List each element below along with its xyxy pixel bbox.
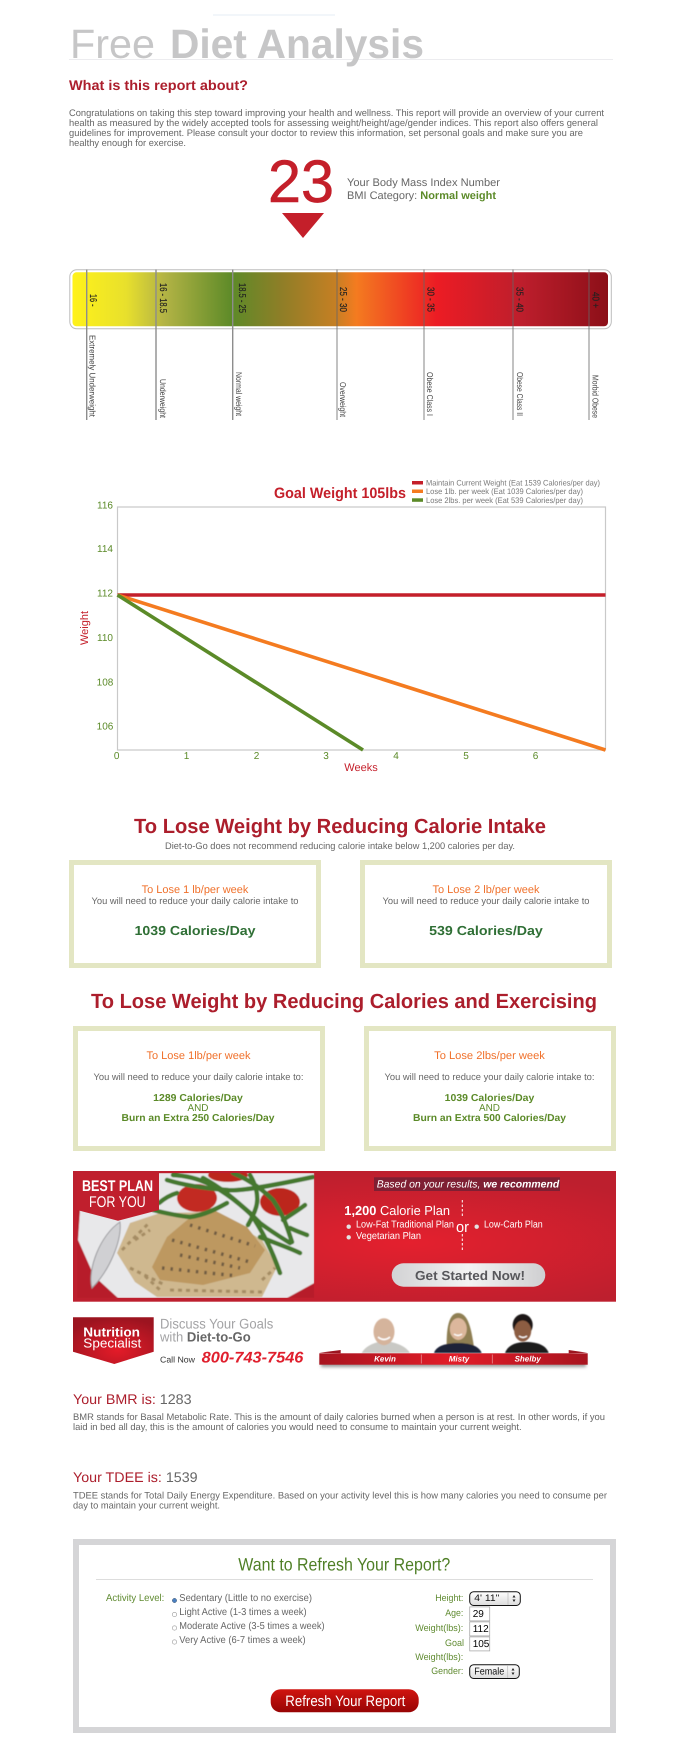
y axis values: 116 — [97, 500, 113, 512]
specialist: Shelby — [505, 1314, 549, 1353]
photo: chicken with rice and green beans — [77, 1168, 314, 1298]
name ribbon — [319, 1350, 588, 1367]
phone contact block: with Diet-to-Go — [159, 1330, 251, 1345]
BMI category labels: Normal weight — [234, 372, 244, 417]
gender select: Female — [474, 1666, 505, 1678]
panel: lose 2 lbs with exercise: To Lose 2lbs/per week — [434, 1050, 545, 1062]
BMR section: laid in bed all day, this is the amount of calories you would need to consume to maintain your current weight. — [73, 1422, 522, 1433]
plan options: Low-Carb Plan — [484, 1220, 543, 1231]
field labels: Goal — [445, 1638, 464, 1649]
y axis title: Weight — [79, 611, 91, 645]
weight input: 112 — [473, 1624, 489, 1635]
chart legend: Lose 1lb. per week (Eat 1039 Calories/per day) — [426, 487, 583, 496]
activity level options — [106, 1593, 325, 1646]
panel: lose 1 lb with exercise: Burn an Extra 250 Calories/Day — [122, 1113, 275, 1124]
height select: 4' 11" — [474, 1593, 499, 1604]
button: refresh your report: Refresh Your Report — [285, 1693, 406, 1710]
panel: plan recommendation banner — [73, 1168, 616, 1302]
BMI category labels: Obese Class I — [425, 372, 435, 416]
BMI caption — [347, 177, 500, 202]
age input: 29 — [473, 1609, 484, 1620]
y axis values — [97, 500, 114, 732]
TDEE section: TDEE stands for Total Daily Energy Expenditure. Based on your activity level this is how many calories you need to consume per — [73, 1490, 607, 1502]
tomatoes — [177, 1184, 217, 1212]
x axis title: Weeks — [344, 762, 378, 774]
panel: lose 1 lb with exercise: You will need to reduce your daily calorie intake to: — [94, 1072, 304, 1083]
diet analysis report page — [69, 14, 616, 1733]
activity level options: Light Active (1-3 times a week) — [179, 1607, 307, 1618]
BMI scale chart — [70, 270, 611, 420]
BMI caption: Your Body Mass Index Number — [347, 177, 500, 189]
badge: nutrition specialist: Specialist — [83, 1336, 142, 1351]
x axis values: 4 — [393, 751, 399, 762]
x axis values: 2 — [254, 751, 260, 762]
field labels: Weight(lbs): — [415, 1652, 463, 1663]
intro paragraph: guidelines for improvement. Please consult your doctor to review this information, set personal goals and make sure you are — [69, 128, 583, 139]
heading: what is this report about: What is this report about? — [69, 77, 248, 93]
x axis values: 5 — [463, 751, 469, 762]
goal weight input: 105 — [473, 1639, 490, 1650]
BMI result — [268, 148, 500, 238]
BMI ranges: 40 + — [590, 292, 600, 308]
BMI category labels: Overweight — [338, 382, 348, 418]
scale bar — [70, 270, 611, 329]
BMI ranges: 16 - — [87, 294, 98, 306]
title: Diet Analysis — [170, 21, 424, 67]
x axis values: 1 — [184, 751, 190, 762]
activity level options: Activity Level: — [106, 1593, 164, 1604]
ribbon: best plan for you: FOR YOU — [89, 1194, 146, 1211]
BMI ranges: 35 - 40 — [514, 287, 524, 312]
heading: calories and exercising: To Lose Weight by Reducing Calories and Exercising — [91, 990, 597, 1013]
panel: lose 2 lbs with exercise: AND — [479, 1103, 500, 1114]
chart title: Goal Weight 105lbs — [274, 485, 406, 502]
intro paragraph: health as measured by the widely accepted tools for assessing weight/height/age/gender indices. This report also offers general — [69, 118, 598, 129]
phone contact block: 800-743-7546 — [202, 1350, 304, 1367]
x axis values: 0 — [114, 751, 120, 762]
plan options: 1,200 Calorie Plan — [344, 1203, 450, 1218]
field labels: Weight(lbs): — [415, 1623, 463, 1634]
chart legend: Maintain Current Weight (Eat 1539 Calories/per day) — [426, 478, 600, 488]
beans — [153, 1173, 313, 1273]
x axis values: 6 — [533, 751, 539, 762]
BMI category labels: Morbid Obese — [590, 375, 600, 418]
TDEE section: Your TDEE is: 1539 — [73, 1469, 198, 1485]
panel: lose 2 lb intake: To Lose 2 lb/per week — [432, 884, 540, 896]
ribbon: best plan for you: BEST PLAN — [82, 1178, 153, 1195]
field labels — [415, 1593, 464, 1677]
BMR section: BMR stands for Basal Metabolic Rate. This is the amount of daily calories burned when a person is at rest. In other words, if you — [73, 1412, 605, 1423]
phone contact block: Call Now — [160, 1355, 196, 1365]
plot frame — [118, 507, 606, 750]
field labels: Age: — [445, 1608, 463, 1619]
y axis values: 114 — [97, 544, 113, 555]
panel: lose 1 lb with exercise: AND — [188, 1103, 208, 1114]
intro paragraph — [69, 108, 604, 149]
panel: lose 2 lbs with exercise: Burn an Extra 500 Calories/Day — [413, 1113, 566, 1124]
age input — [470, 1607, 490, 1621]
TDEE section — [73, 1469, 607, 1512]
badge: nutrition specialist: Nutrition — [83, 1325, 140, 1340]
BMI ranges: 16 - 18.5 — [157, 283, 168, 313]
panel: lose 2 lbs with exercise: You will need to reduce your daily calorie intake to: — [384, 1072, 594, 1083]
BMI ranges — [87, 283, 600, 313]
activity level options: Sedentary (Little to no exercise) — [179, 1593, 312, 1604]
x axis values: 3 — [323, 751, 329, 762]
chart legend: Lose 2lbs. per week (Eat 539 Calories/per day) — [426, 496, 583, 505]
activity level options: Moderate Active (3-5 times a week) — [179, 1621, 325, 1632]
button: get started now: Get Started Now! — [415, 1268, 525, 1283]
intro paragraph: healthy enough for exercise. — [69, 138, 186, 149]
button: refresh your report — [271, 1689, 419, 1712]
specialist: Kevin — [362, 1318, 410, 1353]
nutrition specialists team — [319, 1313, 588, 1367]
name ribbon: Misty — [449, 1354, 470, 1364]
chart legend — [412, 478, 600, 505]
weight input — [470, 1622, 490, 1636]
heading: reducing calorie intake: To Lose Weight by Reducing Calorie Intake — [134, 815, 546, 838]
panel: lose 2 lbs with exercise — [366, 1028, 614, 1148]
scale ticks — [87, 270, 589, 420]
form heading: Want to Refresh Your Report? — [238, 1555, 450, 1575]
BMR section — [73, 1391, 605, 1433]
BMI category labels: Extremely Underweight — [88, 335, 98, 418]
specialist: Misty — [434, 1313, 482, 1353]
goal weight input — [470, 1637, 490, 1651]
title: Free — [70, 21, 155, 67]
badge: nutrition specialist — [73, 1317, 154, 1364]
BMI ranges: 30 - 35 — [424, 287, 436, 312]
knife — [91, 1222, 120, 1288]
name ribbon: Kevin — [374, 1354, 396, 1364]
BMI category labels: Underweight — [158, 379, 168, 419]
BMI category labels: Obese Class II — [515, 372, 525, 416]
weight line chart — [79, 478, 606, 774]
recommendation heading: Based on your results, we recommend — [377, 1179, 560, 1191]
y axis values: 112 — [97, 588, 113, 600]
panel: lose 1 lb intake: You will need to reduce your daily calorie intake to — [92, 896, 298, 907]
button: get started now — [392, 1263, 545, 1287]
BMI ranges: 25 - 30 — [337, 287, 348, 312]
rice — [117, 1212, 277, 1297]
panel: lose 1 lb intake: To Lose 1 lb/per week — [142, 884, 249, 896]
BMI caption: BMI Category: Normal weight — [347, 190, 496, 202]
panel: lose 2 lb intake — [362, 862, 610, 966]
BMI ranges: 18.5 - 25 — [236, 283, 247, 313]
activity level options: Very Active (6-7 times a week) — [179, 1635, 306, 1646]
title — [69, 14, 613, 67]
field labels: Height: — [435, 1593, 463, 1604]
y axis values: 110 — [97, 633, 113, 644]
plan options: or — [456, 1219, 469, 1236]
phone contact block: Discuss Your Goals — [160, 1315, 273, 1331]
plan options: Low-Fat Traditional Plan — [356, 1220, 454, 1231]
plot lines — [118, 595, 606, 750]
plan options — [344, 1200, 543, 1252]
BMI category labels — [88, 335, 600, 419]
y axis values: 108 — [97, 678, 114, 688]
panel: lose 2 lbs with exercise: 1039 Calories/Day — [445, 1093, 535, 1104]
phone contact block — [159, 1315, 304, 1367]
panel: lose 1 lb intake — [72, 862, 318, 966]
icon: down arrow — [282, 213, 324, 238]
panel: lose 1 lb with exercise: 1289 Calories/Day — [153, 1093, 243, 1104]
height select — [470, 1592, 520, 1606]
field labels: Gender: — [431, 1666, 463, 1677]
BMI number: 23 — [268, 148, 334, 215]
panel: lose 1 lb with exercise — [76, 1028, 322, 1148]
x axis values — [114, 751, 539, 762]
ribbon: best plan for you — [77, 1173, 159, 1221]
gender select — [470, 1665, 519, 1678]
panel: lose 2 lb intake: 539 Calories/Day — [429, 923, 544, 938]
panel: lose 1 lb with exercise: To Lose 1lb/per week — [146, 1050, 251, 1062]
BMR section: Your BMR is: 1283 — [73, 1391, 192, 1407]
panel: refresh report form — [76, 1542, 613, 1730]
panel: lose 1 lb intake: 1039 Calories/Day — [134, 923, 256, 938]
note: 1,200 calorie minimum: Diet-to-Go does not recommend reducing calorie intake below 1,200 calories per day. — [165, 841, 515, 852]
plan options: Vegetarian Plan — [356, 1231, 421, 1242]
panel: lose 2 lb intake: You will need to reduce your daily calorie intake to — [382, 896, 590, 907]
chicken — [152, 1208, 265, 1285]
y axis values: 106 — [97, 722, 114, 732]
TDEE section: day to maintain your current weight. — [73, 1500, 220, 1512]
intro paragraph: Congratulations on taking this step toward improving your health and wellness. This report will provide an overview of your current — [69, 108, 604, 119]
name ribbon: Shelby — [515, 1354, 541, 1364]
